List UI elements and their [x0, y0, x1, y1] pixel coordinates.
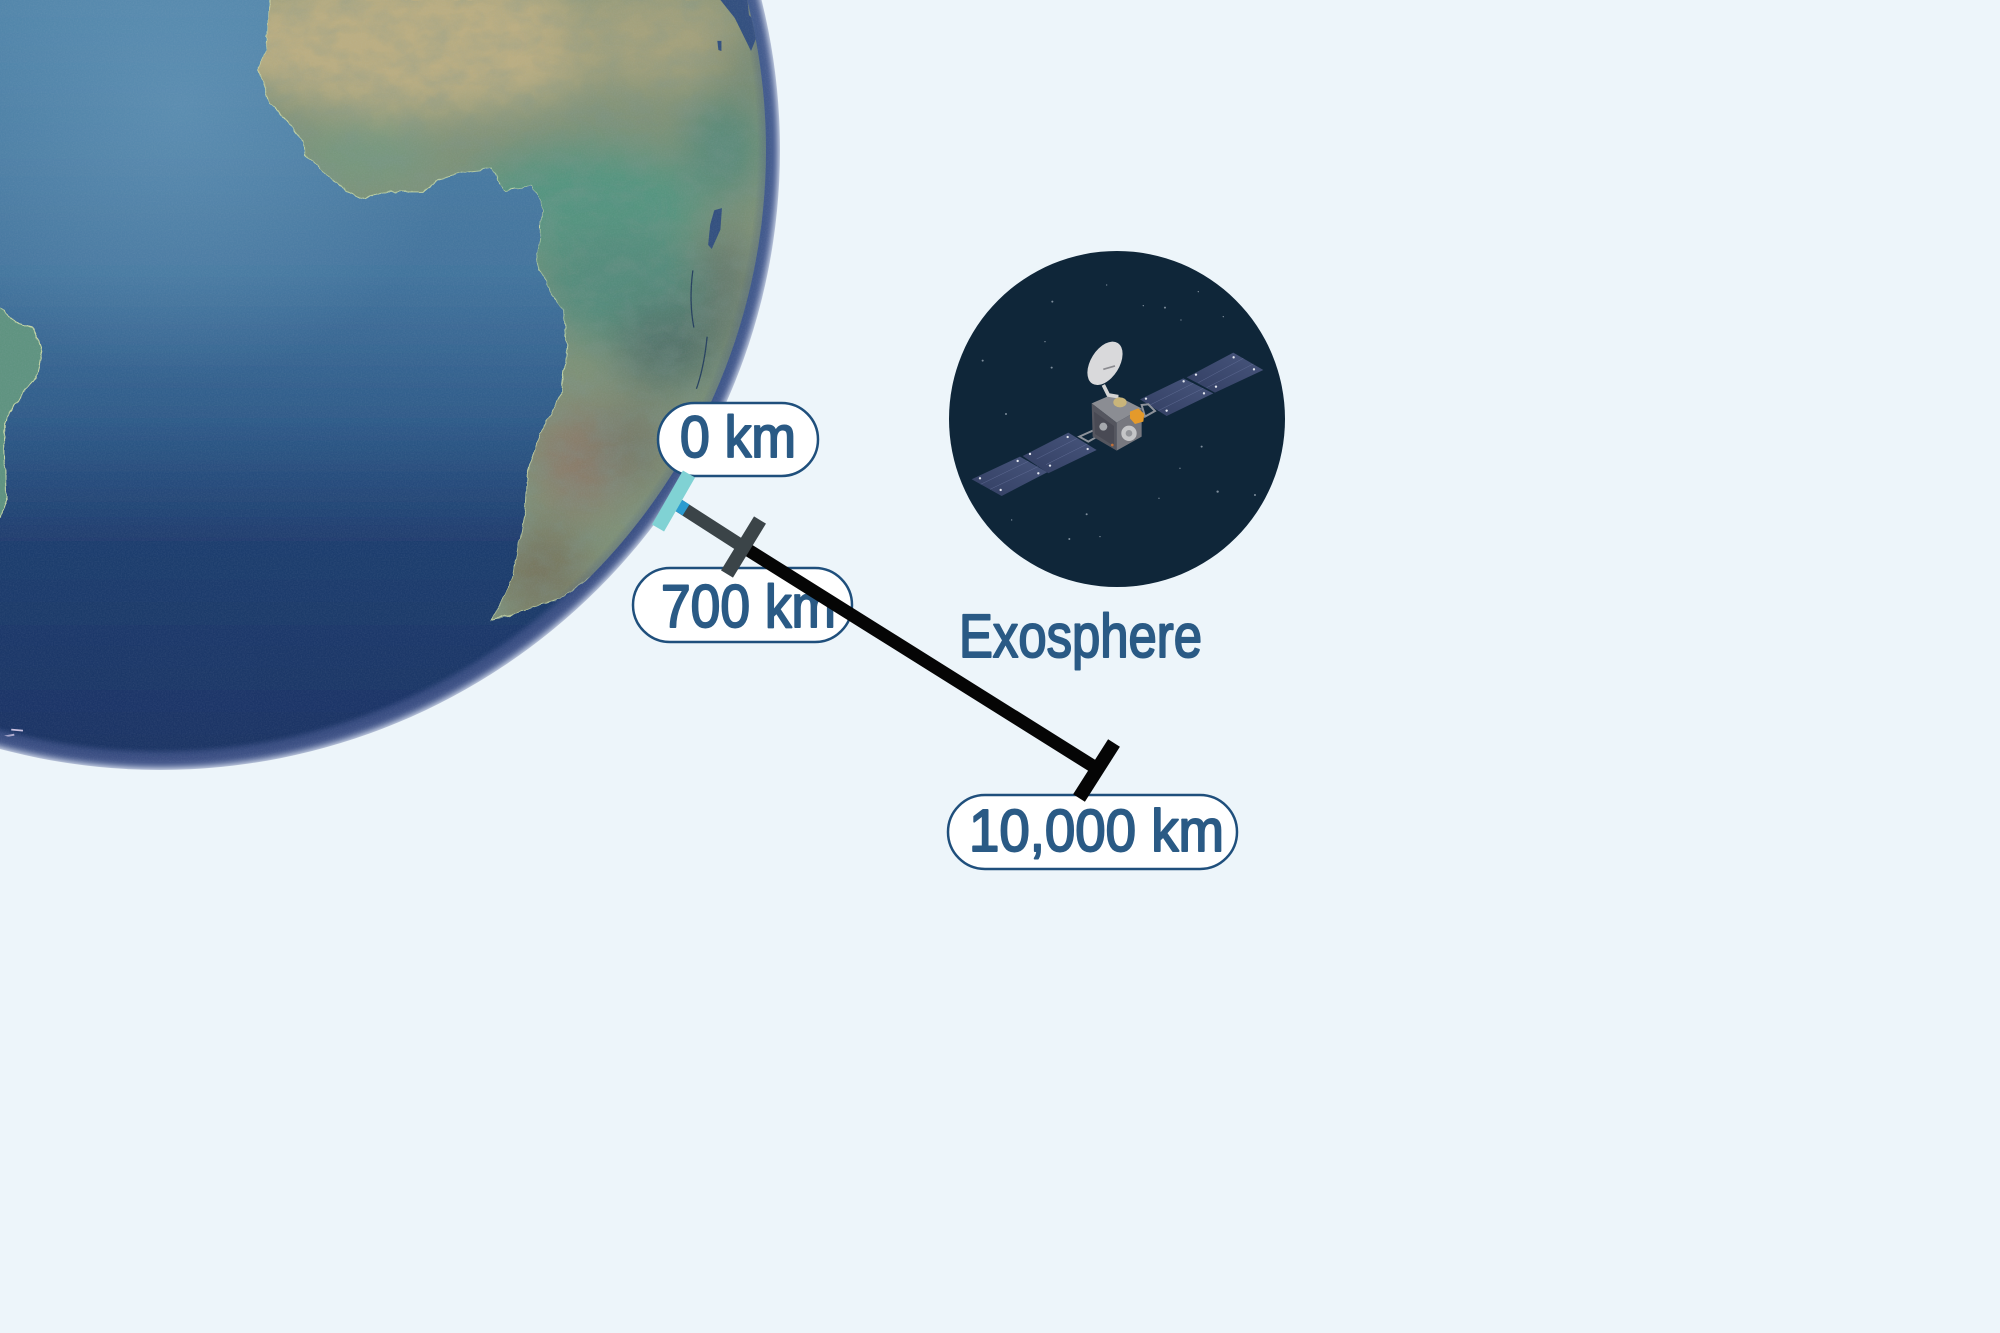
infographic canvas: [0, 0, 1285, 870]
stars: [982, 284, 1256, 540]
space circle: [949, 251, 1285, 587]
solar panels: [972, 353, 1263, 496]
body: [1092, 394, 1142, 423]
satellite: [972, 335, 1263, 496]
label: 700 km: 700 km: [661, 573, 836, 640]
lakes and red sea: [708, 0, 761, 249]
panel arms: [1079, 404, 1155, 442]
surface tick: 0 km: [658, 474, 689, 528]
altitude line: 0 to 700 km: [678, 505, 760, 574]
dish: [1080, 335, 1130, 391]
continent: South America: [0, 304, 42, 520]
dish mount: [1103, 385, 1118, 397]
globe: Earth: [0, 0, 780, 770]
Antarctica fragments: [4, 728, 23, 737]
altitude line: 700 to 10,000 km: [745, 548, 1114, 798]
ocean: [0, 0, 774, 764]
heading: Exosphere: Exosphere: [959, 602, 1202, 670]
label: 0 km: [658, 403, 818, 476]
label: 0 km: 0 km: [680, 405, 796, 470]
atmosphere limb: [0, 0, 782, 772]
orange box: [1130, 408, 1144, 424]
continents: [0, 0, 867, 768]
label: 10,000 km: 10,000 km: [969, 798, 1224, 864]
panel: satellite in space: [949, 251, 1285, 587]
disc: [1121, 426, 1137, 441]
atmosphere band: [0, 0, 770, 760]
continent: Africa: [257, 0, 766, 622]
